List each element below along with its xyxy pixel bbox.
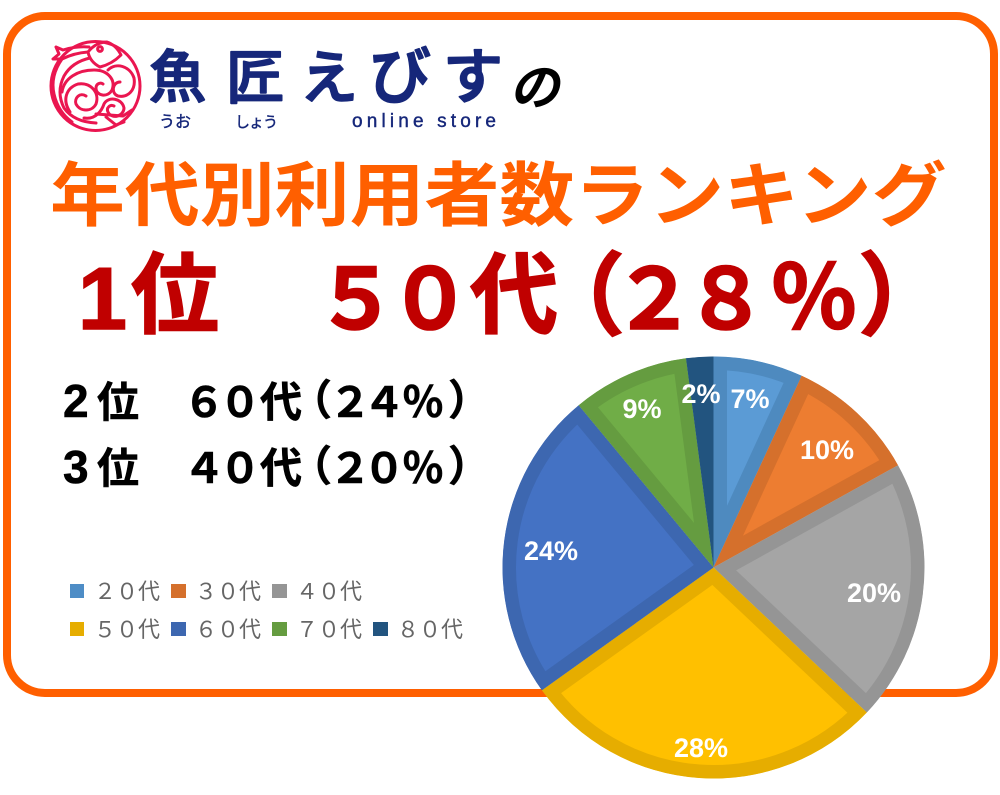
legend: ８０代 [397, 612, 463, 644]
legend: ７０代 [296, 612, 362, 644]
logo reading and online store caption [159, 111, 496, 132]
logo reading and online store caption: うお [159, 113, 191, 131]
pie chart: 10% [800, 435, 854, 465]
third place ranking: （ [290, 443, 332, 490]
pie chart: 7% [730, 384, 770, 414]
icon: fish and wave logo [51, 42, 140, 130]
pie chart [503, 356, 924, 779]
title: 年代別利用者数ランキング [50, 157, 946, 235]
logo wordmark: 匠 [226, 46, 284, 111]
third place ranking: ％ [402, 445, 444, 492]
logo reading and online store caption: しょう [235, 114, 278, 131]
third place ranking: ） [448, 443, 490, 490]
logo wordmark: 魚 [149, 46, 206, 110]
third place ranking: 位 [97, 445, 139, 492]
second place ranking: 位 [97, 379, 139, 426]
first place ranking: 1 [78, 249, 127, 348]
first place ranking: 位 [131, 246, 219, 345]
second place ranking: ２４ [329, 379, 405, 426]
first place ranking: ２８ [612, 253, 768, 347]
third place ranking: ２０ [329, 445, 405, 492]
first place ranking: （ [535, 247, 625, 347]
pie chart: 9% [622, 394, 662, 424]
second place ranking: 2 [63, 375, 89, 427]
legend: ３０代 [195, 574, 261, 606]
logo wordmark: び [369, 43, 431, 112]
second place ranking: ６０代 [183, 379, 302, 426]
logo wordmark: す [443, 44, 503, 111]
logo wordmark [149, 43, 503, 112]
first place ranking [78, 246, 948, 348]
second place ranking: ） [448, 377, 490, 424]
second place ranking: ％ [402, 379, 444, 426]
first place ranking: ） [858, 247, 948, 347]
first place ranking: ５０ [314, 253, 472, 347]
pie chart: 24% [524, 536, 578, 566]
pie chart: 20% [847, 578, 901, 608]
heading particle: の [509, 60, 563, 116]
logo reading and online store caption: online store [352, 111, 496, 132]
first place ranking: 代 [470, 246, 558, 345]
first place ranking: ％ [770, 249, 858, 348]
second place ranking [63, 375, 490, 427]
legend: ２０代 [94, 574, 160, 606]
legend: ６０代 [195, 612, 261, 644]
third place ranking: 3 [63, 441, 89, 493]
second place ranking: （ [290, 377, 332, 424]
legend [70, 574, 463, 644]
third place ranking: ４０代 [183, 445, 302, 492]
third place ranking [63, 441, 490, 493]
pie chart: 28% [674, 733, 728, 763]
pie chart: 2% [681, 379, 721, 409]
legend: ４０代 [296, 574, 362, 606]
legend: ５０代 [94, 612, 160, 644]
logo wordmark: え [300, 46, 358, 111]
